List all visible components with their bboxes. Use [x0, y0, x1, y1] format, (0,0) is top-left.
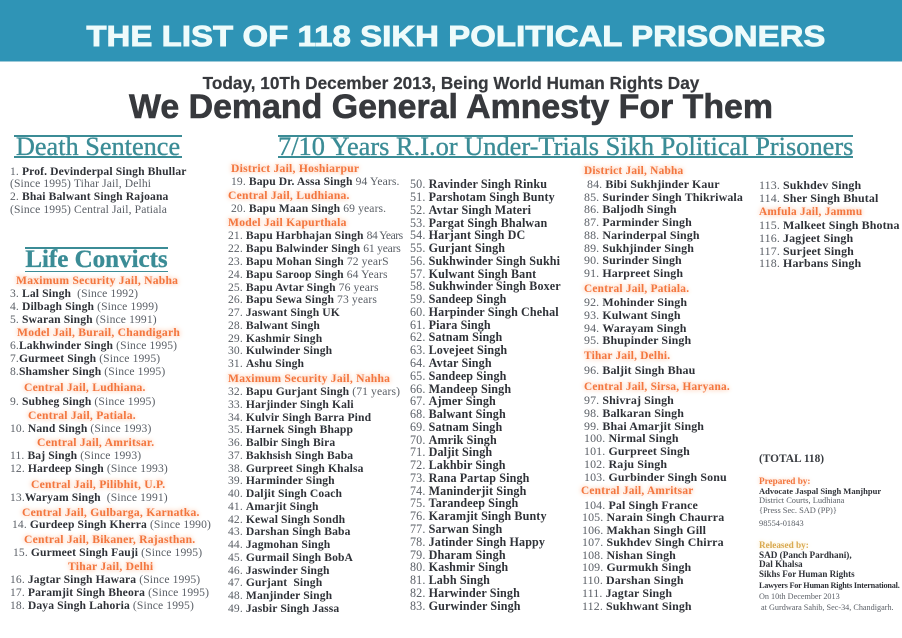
panel: prepared by: District Courts, Ludhiana [759, 496, 844, 505]
panel: life convicts list: 9. Subheg Singh (Since 1995) [10, 395, 155, 408]
panel: life convicts list: 10. Nand Singh (Since 1993) [10, 422, 151, 435]
panel: life convicts list: 12. Hardeep Singh (Since 1993) [10, 462, 168, 475]
panel: released by [758, 540, 900, 612]
panel: released by: Lawyers For Human Rights International. [759, 581, 900, 590]
panel: column 19-49: 38. Gurpreet Singh Khalsa [228, 462, 364, 474]
panel: column 19-49: Model Jail Kapurthala [228, 216, 347, 229]
panel: released by: SAD (Panch Pardhani), [759, 550, 852, 560]
panel: column 84-112: 86. Baljodh Singh [584, 202, 677, 216]
panel: life convicts list [10, 274, 211, 612]
panel: column 84-112: 88. Narinderpal Singh [584, 228, 700, 242]
panel: released by: Sikhs For Human Rights [759, 569, 855, 579]
panel: column 19-49: 25. Bapu Avtar Singh 76 years [228, 281, 379, 294]
panel: life convicts list: 16. Jagtar Singh Hawara (Since 1995) [10, 573, 200, 586]
panel: column 113-118 [758, 178, 900, 270]
panel: column 84-112: 92. Mohinder Singh [584, 295, 687, 309]
panel: life convicts list: 4. Dilbagh Singh (Since 1999) [10, 300, 158, 313]
panel: column 19-49: 24. Bapu Saroop Singh 64 Years [228, 268, 388, 281]
panel: column 84-112: District Jail, Nabha [584, 165, 683, 177]
panel: life convicts list: Model Jail, Burail, Chandigarh [17, 326, 180, 339]
panel: column 84-112: 91. Harpreet Singh [584, 266, 683, 280]
panel: column 84-112: 109. Gurmukh Singh [582, 560, 691, 574]
panel: column 84-112: 84. Bibi Sukhjinder Kaur [587, 177, 720, 191]
demand headline: We Demand General Amnesty For Them [129, 88, 773, 126]
panel: column 19-49: 23. Bapu Mohan Singh 72 yearS [228, 255, 389, 268]
panel: column 19-49: 21. Bapu Harbhajan Singh 84 Years [228, 229, 403, 242]
panel: column 84-112: 102. Raju Singh [584, 457, 667, 471]
panel: column 19-49: 42. Kewal Singh Sondh [228, 512, 345, 526]
panel: column 19-49: 34. Kulvir Singh Barra Pind [228, 410, 371, 424]
panel: column 84-112: 101. Gurpreet Singh [584, 444, 690, 458]
panel: column 84-112: 111. Jagtar Singh [582, 586, 672, 600]
panel: column 84-112: 89. Sukhjinder Singh [584, 241, 694, 255]
panel: column 84-112: 110. Darshan Singh [582, 573, 684, 587]
panel: column 84-112: Tihar Jail, Delhi. [584, 350, 670, 362]
panel: column 19-49: 35. Harnek Singh Bhapp [228, 423, 353, 436]
panel: life convicts list: Central Jail, Ludhiana. [24, 381, 146, 394]
panel: column 19-49: 31. Ashu Singh [228, 357, 304, 370]
panel: column 19-49: 37. Bakhsish Singh Baba [228, 449, 353, 462]
panel: life convicts list: Central Jail, Amritsar. [37, 436, 154, 449]
panel: released by: Released by: [759, 540, 809, 550]
panel: column 19-49: 45. Gurmail Singh BobA [228, 551, 353, 564]
panel: column 84-112: Central Jail, Amritsar [581, 485, 693, 497]
panel: column 19-49: 36. Balbir Singh Bira [228, 436, 335, 449]
panel: column 84-112: 112. Sukhwant Singh [582, 599, 692, 613]
panel: column 84-112: 105. Narain Singh Chaurra [582, 510, 724, 524]
panel: life convicts list: 14. Gurdeep Singh Kherra (Since 1990) [12, 518, 211, 531]
title banner [0, 0, 902, 62]
panel: column 19-49: 30. Kulwinder Singh [228, 344, 332, 357]
panel: prepared by: 98554-01843 [759, 519, 804, 528]
panel: column 84-112: 106. Makhan Singh Gill [582, 523, 706, 537]
panel: life convicts list: Maximum Security Jail, Nabha [16, 274, 178, 287]
panel: column 19-49: 39. Harminder Singh [228, 474, 335, 487]
panel: column 19-49: Central Jail, Ludhiana. [228, 189, 350, 202]
panel: life convicts list: 17. Paramjit Singh Bheora (Since 1995) [10, 586, 209, 599]
panel: column 113-118: 113. Sukhdev Singh [759, 178, 861, 192]
panel: death sentence list: (Since 1995) Central Jail, Patiala [10, 203, 167, 216]
panel: column 19-49: District Jail, Hoshiarpur [231, 162, 359, 175]
panel: prepared by: Prepared by: [759, 476, 810, 486]
panel: column 19-49: 48. Manjinder Singh [228, 589, 332, 602]
panel: death sentence list: (Since 1995) Tihar Jail, Delhi [10, 177, 151, 190]
panel: released by: at Gurdwara Sahib, Sec-34, Chandigarh. [761, 603, 894, 612]
panel: prepared by: {Press Sec. SAD (PP)} [759, 506, 837, 515]
panel: life convicts list: 5. Swaran Singh (Since 1991) [10, 313, 157, 326]
panel: death sentence list: 1. Prof. Devinderpal Singh Bhullar [10, 165, 187, 178]
panel: column 19-49: 22. Bapu Balwinder Singh 61 years [228, 242, 401, 255]
panel: column 113-118: 114. Sher Singh Bhutal [759, 191, 878, 205]
panel: life convicts list: Central Jail, Gulbarga, Karnatka. [22, 506, 200, 519]
panel: released by: On 10th December 2013 [759, 592, 840, 601]
panel: life convicts list: 3. Lal Singh (Since 1992) [10, 287, 138, 300]
panel: column 19-49: 28. Balwant Singh [228, 319, 320, 332]
panel: column 19-49: 46. Jaswinder Singh [228, 564, 330, 576]
panel: life convicts list: 8.Shamsher Singh (Since 1995) [10, 365, 165, 378]
panel: life convicts list: 13.Waryam Singh (Since 1991) [10, 491, 168, 504]
panel: column 84-112: Central Jail, Sirsa, Haryana. [584, 381, 730, 393]
panel: life convicts list: 7.Gurmeet Singh (Since 1995) [10, 352, 160, 365]
panel: life convicts list: Tihar Jail, Delhi [68, 560, 153, 573]
panel: life convicts list: 6.Lakhwinder Singh (Since 1995) [10, 339, 177, 352]
panel: column 19-49: 44. Jagmohan Singh [228, 538, 330, 551]
panel: column 84-112: 90. Surinder Singh [584, 253, 682, 267]
panel: column 84-112: 94. Warayam Singh [584, 321, 687, 335]
panel: column 84-112: 98. Balkaran Singh [584, 406, 684, 420]
panel: column 19-49: 49. Jasbir Singh Jassa [228, 602, 339, 615]
panel: column 19-49: 26. Bapu Sewa Singh 73 years [228, 293, 377, 306]
panel: column 19-49: 41. Amarjit Singh [228, 500, 319, 513]
panel: death sentence list [10, 165, 187, 216]
panel: released by: Dal Khalsa [759, 559, 803, 569]
total count: (TOTAL 118) [759, 453, 824, 465]
panel: column 19-49: 43. Darshan Singh Baba [228, 525, 350, 538]
panel: column 19-49: 19. Bapu Dr. Assa Singh 94 Years. [231, 175, 399, 188]
panel: life convicts list: Central Jail, Bikaner, Rajasthan. [24, 533, 195, 546]
panel: column 84-112: 96. Baljit Singh Bhau [584, 363, 695, 377]
title: THE LIST OF 118 SIKH POLITICAL PRISONERS [87, 21, 825, 53]
panel: column 113-118: 115. Malkeet Singh Bhotna [759, 218, 900, 232]
panel: column 84-112: 93. Kulwant Singh [584, 308, 681, 322]
panel: life convicts list: Central Jail, Patiala. [28, 409, 136, 422]
panel: column 19-49: 32. Bapu Gurjant Singh (71 years) [228, 385, 400, 398]
panel: column 113-118: 118. Harbans Singh [759, 256, 861, 270]
panel: column 19-49: 29. Kashmir Singh [228, 332, 322, 345]
panel: life convicts list: 15. Gurmeet Singh Fauji (Since 1995) [13, 546, 202, 559]
panel: column 19-49: 27. Jaswant Singh UK [228, 306, 340, 319]
heading: death sentence: Death Sentence [16, 132, 180, 161]
panel: column 84-112: 103. Gurbinder Singh Sonu [584, 470, 727, 484]
panel: column 84-112: 100. Nirmal Singh [584, 431, 679, 445]
panel: column 84-112: Central Jail, Patiala. [584, 283, 689, 295]
panel: column 113-118: 116. Jagjeet Singh [759, 231, 853, 245]
panel: column 84-112: 97. Shivraj Singh [584, 393, 674, 407]
panel: death sentence list: 2. Bhai Balwant Singh Rajoana [10, 190, 168, 203]
heading: under-trials: 7/10 Years R.I.or Under-Trials Sikh Political Prisoners [278, 131, 853, 161]
panel: column 50-83: 50. Ravinder Singh Rinku 51. Parshotam Singh Bunty 52. Avtar Singh Materi 53. Pargat Singh Bhalwan 54. Harjant Singh DC 55. Gurjant Singh 56. Sukhwinder Singh Sukhi 57. Kulwant Singh Bant 58. Sukhwinder Singh Boxer 59. Sandeep Singh 60. Harpinder Singh Chehal 61. Piara Singh 62. Satnam Singh 63. Lovejeet Singh 64. Avtar Singh 65. Sandeep Singh 66. Mandeep Singh 67. Ajmer Singh 68. Balwant Singh 69. Satnam Singh 70. Amrik Singh 71. Daljit Singh 72. Lakhbir Singh 73. Rana Partap Singh 74. Maninderjit Singh 75. Tarandeep Singh 76. Karamjit Singh Bunty 77. Sarwan Singh 78. Jatinder Singh Happy 79. Dharam Singh 80. Kashmir Singh 81. Labh Singh 82. Harwinder Singh 83. Gurwinder Singh [410, 177, 561, 613]
panel: life convicts list: Central Jail, Pilibhit, U.P. [31, 478, 165, 491]
panel: column 19-49: 47. Gurjant Singh [228, 576, 322, 589]
panel: column 84-112: 107. Sukhdev Singh Chirra [582, 535, 724, 549]
panel: column 19-49: Maximum Security Jail, Nahha [228, 372, 390, 385]
panel: column 84-112: 108. Nishan Singh [582, 548, 676, 562]
panel: column 84-112 [579, 164, 743, 613]
date subtitle: Today, 10Th December 2013, Being World Human Rights Day [203, 73, 699, 93]
panel: column 84-112: 99. Bhai Amarjit Singh [584, 419, 704, 433]
panel: column 84-112: 104. Pal Singh France [584, 498, 698, 512]
heading: life convicts: Life Convicts [25, 246, 168, 273]
panel: column 19-49 [226, 162, 403, 615]
panel: prepared by: Advocate Jaspal Singh Manjhpur [759, 486, 881, 496]
panel: column 84-112: 87. Parminder Singh [584, 215, 692, 229]
panel: life convicts list: 11. Baj Singh (Since 1993) [10, 449, 141, 462]
panel: life convicts list: 18. Daya Singh Lahoria (Since 1995) [10, 599, 194, 612]
panel: column 19-49: 33. Harjinder Singh Kali [228, 398, 354, 411]
panel: column 19-49: 20. Bapu Maan Singh 69 years. [231, 202, 386, 215]
panel: prepared by [758, 476, 881, 528]
panel: column 113-118: 117. Surjeet Singh [759, 244, 854, 258]
panel: column 84-112: 85. Surinder Singh Thikriwala [584, 190, 743, 204]
panel: column 84-112: 95. Bhupinder Singh [584, 333, 691, 347]
panel: column 19-49: 40. Daljit Singh Coach [228, 487, 342, 500]
panel: column 113-118: Amfula Jail, Jammu [759, 206, 862, 218]
